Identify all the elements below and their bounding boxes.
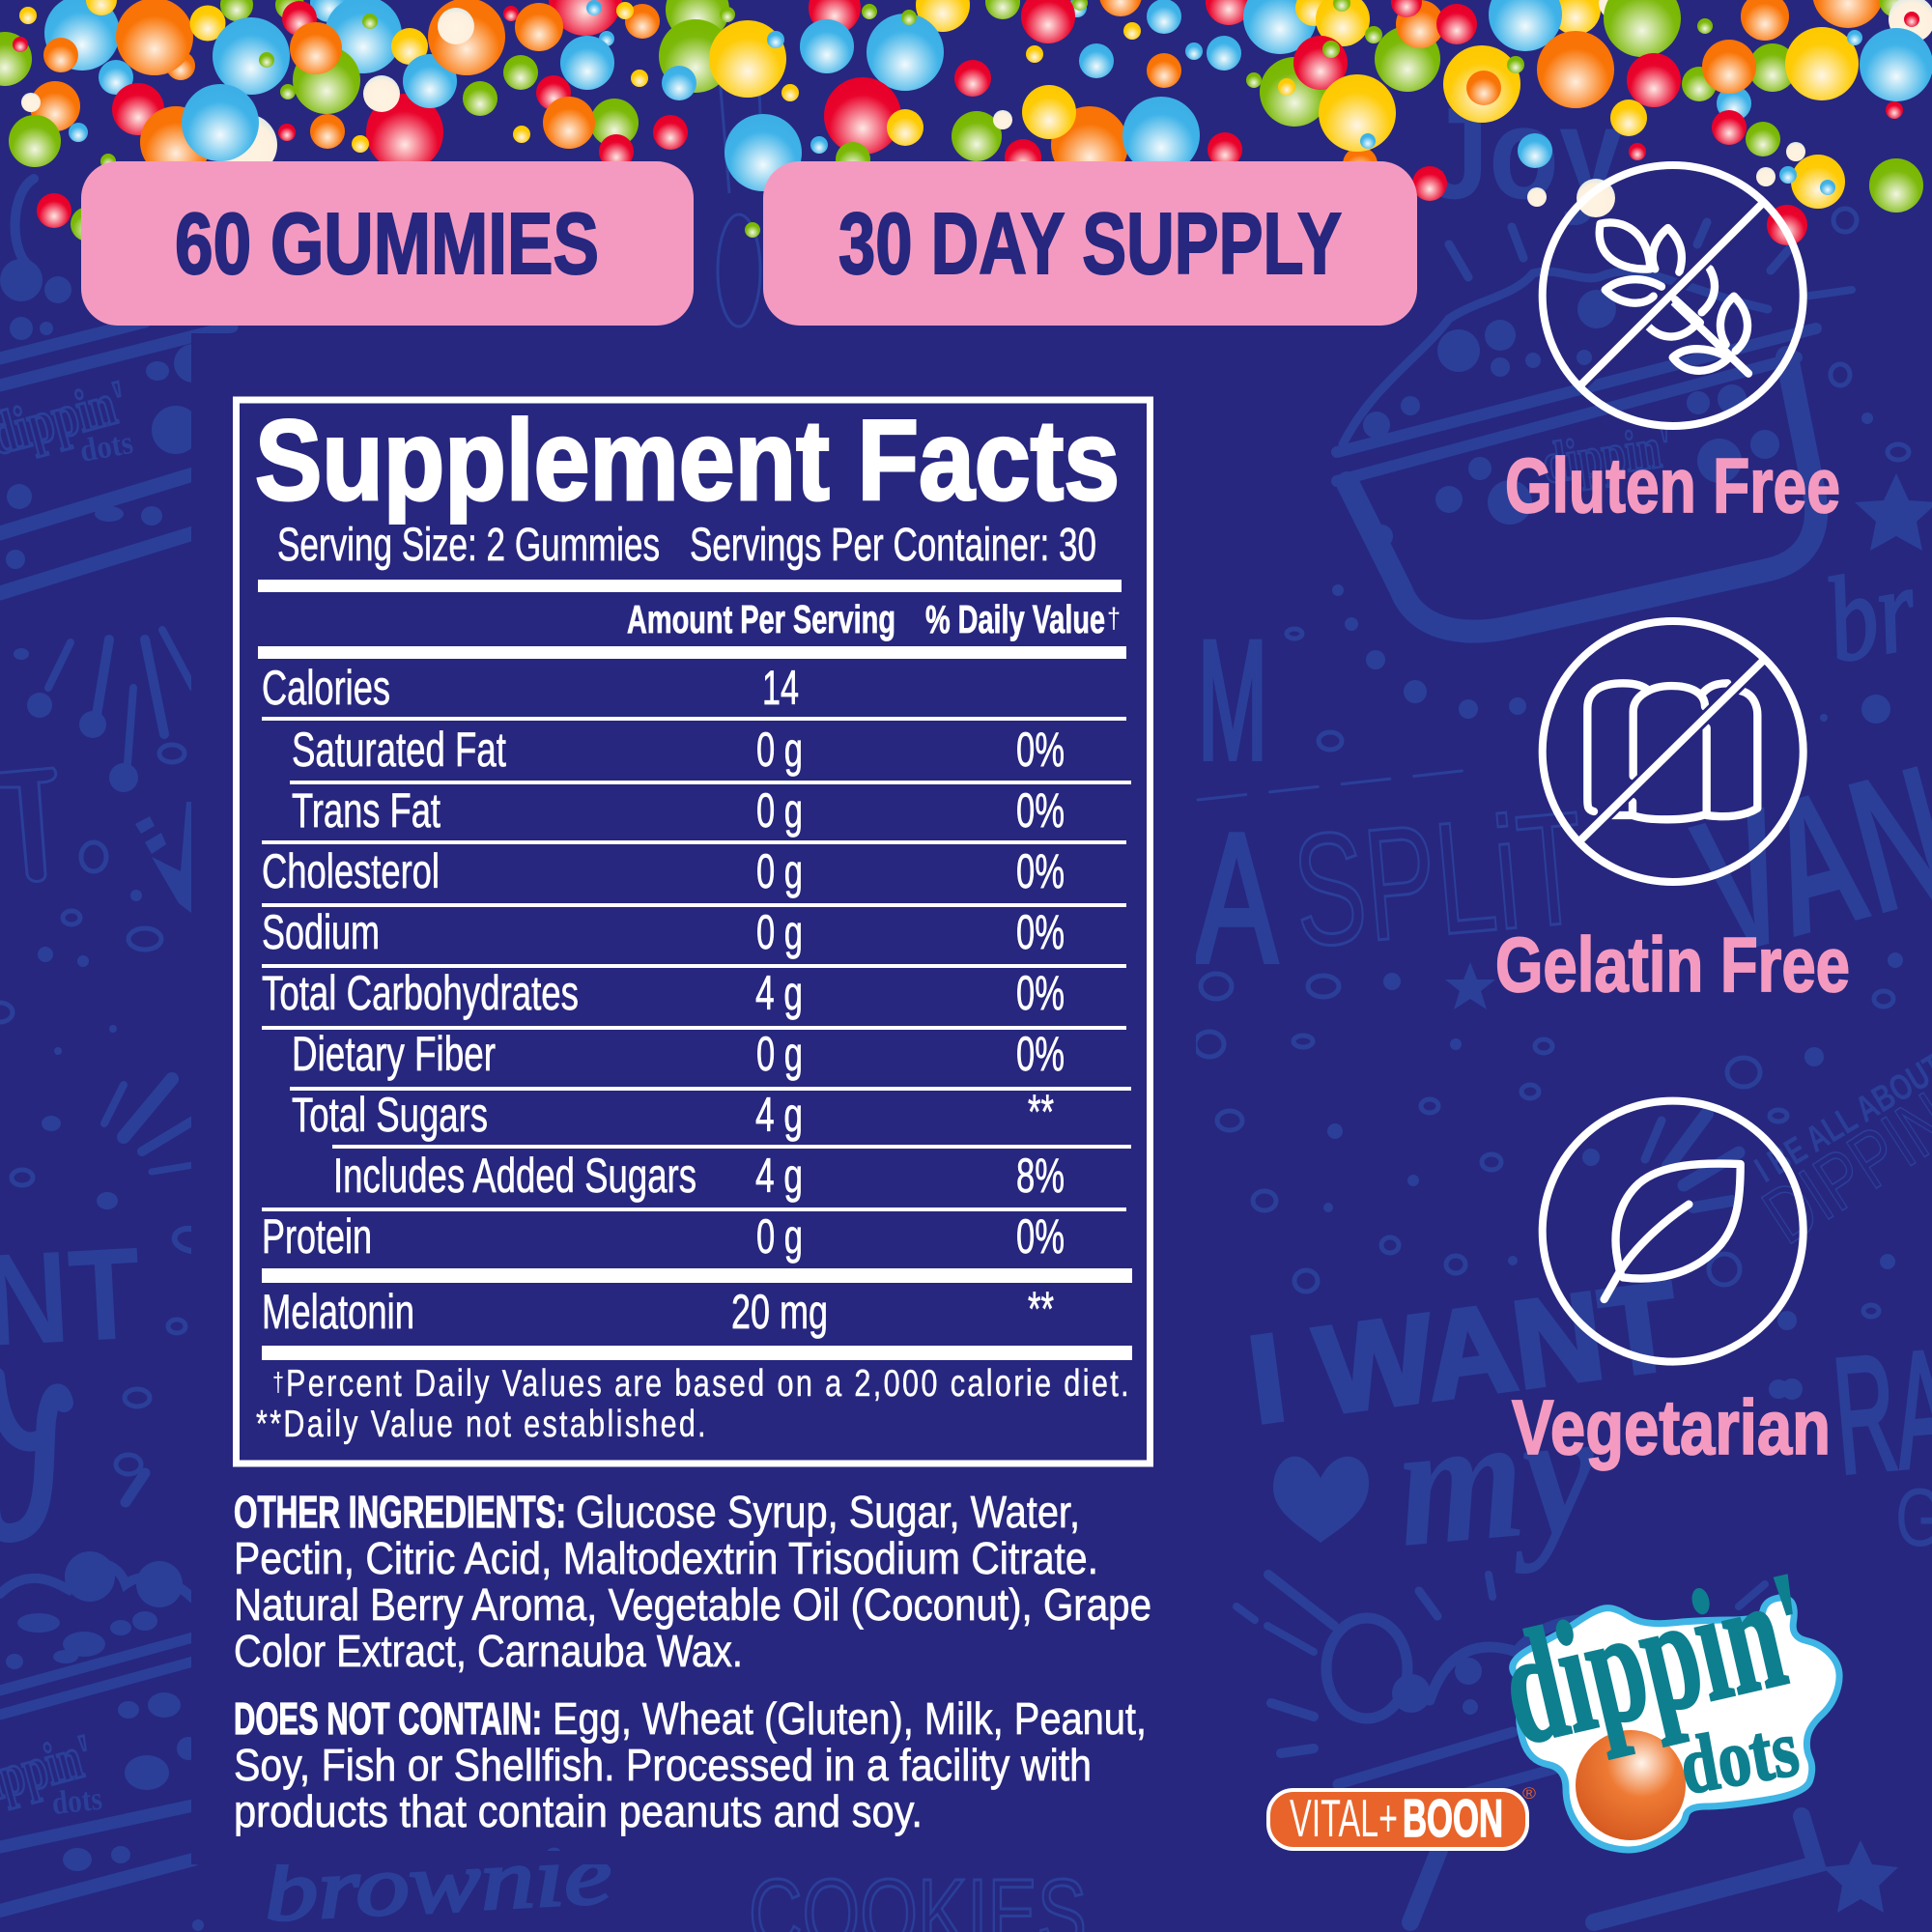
row: total carbohydrates: 4 g <box>755 966 803 1020</box>
row: includes added sugars: 4 g <box>755 1149 803 1203</box>
plain centre panel <box>191 333 1196 1864</box>
logo: vital + boon <box>1268 1784 1537 1849</box>
row: saturated fat: 0% <box>1016 723 1065 777</box>
text block: does not contain: Egg, Wheat (Gluten), Milk, Peanut, <box>553 1693 1147 1744</box>
row: cholesterol: 0% <box>1016 844 1065 898</box>
doodle pattern: bottom strip <box>191 1828 1196 1932</box>
text block: other ingredients: Color Extract, Carnauba Wax. <box>234 1626 743 1676</box>
row: includes added sugars <box>333 1149 1065 1203</box>
row: melatonin: 20 mg <box>731 1285 828 1339</box>
label: gelatin free: Gelatin Free <box>1495 922 1850 1008</box>
row: protein: 0% <box>1016 1209 1065 1264</box>
doodle pattern: right column: I WANT <box>1241 1257 1686 1450</box>
row: trans fat: 0 g <box>756 783 803 838</box>
row: includes added sugars: Includes Added Sugars <box>333 1149 696 1203</box>
footnotes: † <box>272 1367 284 1397</box>
pill: 60 gummies <box>81 161 694 326</box>
text block: other ingredients: Natural Berry Aroma, Vegetable Oil (Coconut), Grape <box>234 1579 1151 1630</box>
doodle pattern: left column: dots <box>77 425 136 469</box>
row: dietary fiber: 0 g <box>756 1027 803 1081</box>
label: gluten free: Gluten Free <box>1505 442 1840 528</box>
row: calories <box>262 661 799 715</box>
row: dietary fiber: Dietary Fiber <box>292 1027 496 1081</box>
icon: vegetarian <box>1543 1101 1804 1362</box>
doodle pattern: left column: dots <box>50 1781 104 1822</box>
row: melatonin: Melatonin <box>262 1285 414 1339</box>
row: protein: Protein <box>262 1209 372 1264</box>
serving information <box>277 520 1096 571</box>
row: total sugars: ** <box>1028 1085 1054 1139</box>
row: protein: 0 g <box>756 1209 803 1264</box>
row: saturated fat: 0 g <box>756 723 803 777</box>
column headers: % Daily Value <box>925 597 1105 641</box>
row: total sugars: 4 g <box>755 1088 803 1142</box>
logo: vital + boon: BOON <box>1403 1788 1503 1848</box>
pill: 30 day supply <box>763 161 1417 326</box>
doodle pattern: centre strip between pills <box>718 68 763 327</box>
logo: vital + boon: VITAL+ <box>1290 1788 1398 1848</box>
row: protein <box>262 1209 1065 1264</box>
row: sodium: 0% <box>1016 905 1065 959</box>
row: sodium <box>262 905 1065 959</box>
row: total sugars: Total Sugars <box>292 1088 488 1142</box>
pill: 60 gummies: 60 GUMMIES <box>175 196 599 293</box>
pill: 30 day supply: 30 DAY SUPPLY <box>838 196 1342 293</box>
text block: does not contain: products that contain peanuts and soy. <box>234 1786 923 1836</box>
row: cholesterol: Cholesterol <box>262 844 440 898</box>
row: melatonin: ** <box>1028 1282 1054 1336</box>
text block: other ingredients: OTHER INGREDIENTS: <box>234 1487 566 1537</box>
doodle pattern: right column: dippin' <box>1539 414 1676 496</box>
candy dots across the top <box>0 0 1932 245</box>
footnotes <box>256 1363 1131 1445</box>
icon: gelatin free <box>1543 621 1804 882</box>
row: calories: 14 <box>762 661 799 715</box>
panel: supplement facts <box>236 397 1150 1463</box>
row: total carbohydrates: 0% <box>1016 966 1065 1020</box>
row: saturated fat: Saturated Fat <box>292 723 506 777</box>
doodle pattern: right column: Joy <box>1425 80 1623 226</box>
row: cholesterol <box>262 844 1065 898</box>
row: dietary fiber: 0% <box>1016 1027 1065 1081</box>
doodle pattern: right column: A <box>1196 796 1277 1001</box>
row: calories: Calories <box>262 661 390 715</box>
doodle pattern: right column <box>1195 80 1932 1922</box>
doodle pattern: right column: my <box>1389 1371 1605 1585</box>
column headers: Amount Per Serving <box>627 597 895 641</box>
row: cholesterol: 0 g <box>756 844 803 898</box>
row: includes added sugars: 8% <box>1016 1149 1065 1203</box>
row: total carbohydrates: Total Carbohydrates <box>262 966 579 1020</box>
text block: other ingredients: Glucose Syrup, Sugar, Water, <box>576 1487 1080 1537</box>
label: vegetarian: Vegetarian <box>1512 1384 1831 1470</box>
logo: vital + boon: ® <box>1522 1784 1537 1803</box>
text block: does not contain: DOES NOT CONTAIN: <box>234 1693 542 1744</box>
footnotes: **Daily Value not established. <box>256 1404 708 1445</box>
text block: does not contain <box>234 1693 1147 1836</box>
logo: dippin' dots: dots <box>1673 1703 1804 1812</box>
row: sodium: Sodium <box>262 905 380 959</box>
row: total sugars <box>292 1085 1054 1142</box>
text block: does not contain: Soy, Fish or Shellfish. Processed in a facility with <box>234 1740 1092 1790</box>
serving information: Serving Size: 2 Gummies <box>277 520 660 571</box>
row: trans fat: 0% <box>1016 783 1065 838</box>
text block: other ingredients <box>234 1487 1151 1676</box>
row: sodium: 0 g <box>756 905 803 959</box>
row: trans fat <box>292 783 1065 838</box>
icon: gluten free <box>1543 165 1804 426</box>
heading: supplement facts: Supplement Facts <box>255 397 1120 525</box>
logo: dippin' dots <box>1487 1537 1839 1850</box>
footnotes: Percent Daily Values are based on a 2,000 calorie diet. <box>286 1363 1131 1405</box>
row: dietary fiber <box>292 1027 1065 1081</box>
serving information: Servings Per Container: 30 <box>690 520 1096 571</box>
text block: other ingredients: Pectin, Citric Acid, Maltodextrin Trisodium Citrate. <box>234 1533 1098 1583</box>
doodle pattern: right column: M <box>1198 607 1267 795</box>
row: total carbohydrates <box>262 966 1065 1020</box>
column headers: † <box>1107 603 1121 635</box>
row: saturated fat <box>292 723 1065 777</box>
row: melatonin <box>262 1282 1054 1339</box>
doodle pattern: left column <box>0 179 232 1931</box>
row: trans fat: Trans Fat <box>292 783 440 838</box>
doodle pattern: right column: SPLiT <box>1287 778 1591 980</box>
